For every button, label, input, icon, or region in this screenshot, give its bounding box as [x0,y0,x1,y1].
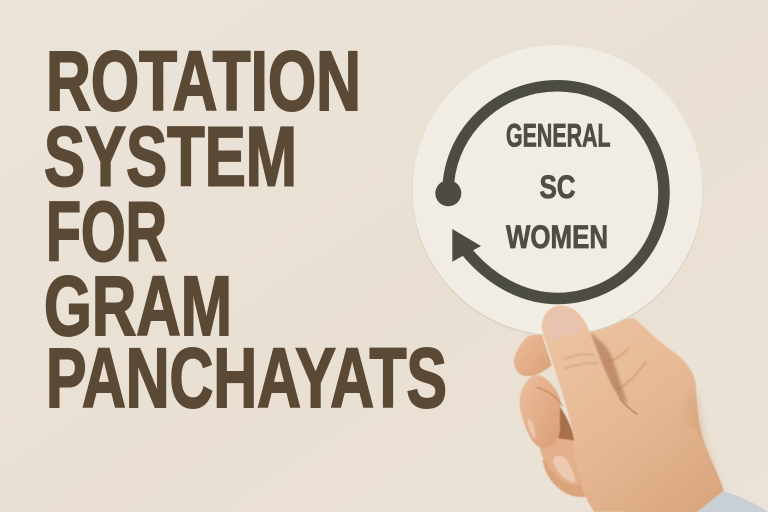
card labels [506,117,610,255]
ring fingernail [553,456,575,483]
middle finger [520,375,560,448]
card labels: GENERAL [506,117,610,153]
finger crease [537,387,563,406]
circular card [412,45,703,336]
upper finger [514,334,552,376]
title: ROTATION [46,34,361,128]
card labels: SC [540,169,576,205]
back of hand [590,318,723,512]
title: FOR [46,184,167,278]
middle fingernail [528,419,535,439]
little finger [543,457,587,497]
right edge shading [687,397,722,510]
knuckle creases [606,347,646,390]
thumb and palm shape [542,306,723,512]
ring finger [540,433,580,485]
palm crease [619,398,638,415]
title: GRAM [44,259,232,353]
hand behind card: fingers and knuckles [514,318,723,512]
dark gap between fingers [557,402,575,441]
thumbnail [546,307,583,342]
card labels: WOMEN [506,219,608,255]
thumb knuckle creases [563,354,598,369]
title: PANCHAYATS [46,331,447,425]
title: SYSTEM [44,110,297,204]
shirt cuff [697,491,768,512]
rotation cycle arrow [435,86,664,298]
crevice shadow beside thumb [589,332,628,405]
thumb and palm in front of card [542,306,723,512]
title [44,34,447,425]
